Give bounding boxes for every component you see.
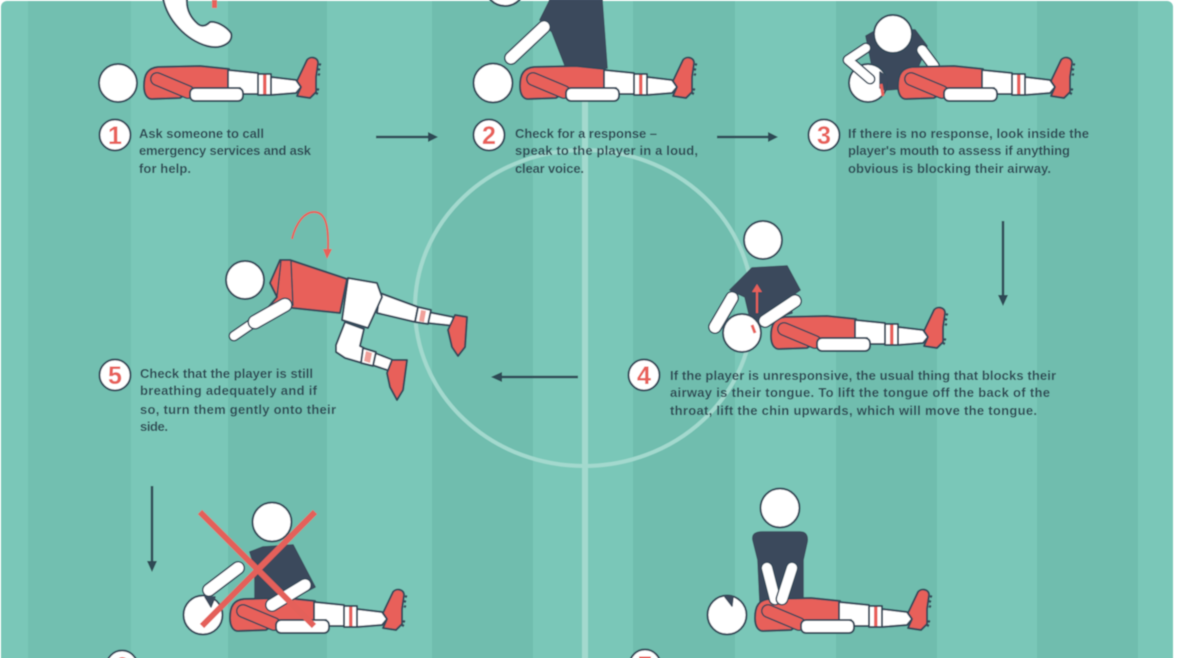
responder torso: [866, 28, 927, 90]
arrow: step 2 to 3: [717, 132, 778, 142]
responder left arm: [715, 298, 732, 327]
number badge 3: 3: [817, 122, 831, 150]
icon: red signal mark: [212, 0, 217, 8]
player arm: [234, 305, 285, 336]
instruction 4: If the player is unresponsive, the usual thing that blocks their: [670, 368, 1056, 383]
step 5 text: [100, 360, 336, 434]
responder head: [252, 502, 292, 542]
responder head: [744, 221, 782, 259]
player head: [708, 596, 746, 634]
player body: [755, 590, 932, 633]
player body: [520, 58, 697, 101]
number badge 5: 5: [108, 362, 122, 390]
arrow: step 3 to 4: [998, 221, 1008, 306]
instruction 4: airway is their tongue. To lift the tongue off the back of the: [670, 385, 1050, 400]
instruction 5: breathing adequately and if: [140, 383, 318, 398]
tongue mark: [881, 84, 883, 96]
red up arrow: [752, 284, 762, 313]
tongue mark: [752, 325, 755, 333]
step 4: lifting the chin: [715, 221, 948, 352]
player head: [723, 314, 761, 352]
responder right arm: [765, 301, 795, 321]
instruction 3: If there is no response, look inside the: [848, 126, 1089, 141]
step 1 text: [100, 120, 312, 176]
mouth wedge: [880, 72, 888, 90]
red cross: [200, 512, 315, 626]
step 1: phone and player lying down: [99, 0, 321, 102]
player head: [99, 64, 137, 102]
instruction 1: emergency services and ask: [139, 143, 312, 158]
player head: [226, 261, 264, 299]
step 5: turning player onto side: [226, 212, 467, 400]
jersey: [265, 260, 347, 313]
instruction 5: Check that the player is still: [140, 366, 313, 381]
arrow: step 1 to 2: [376, 132, 438, 142]
responder torso: [753, 532, 807, 602]
number badge 5: [100, 360, 130, 390]
step 2: responder beside player: [474, 0, 697, 102]
responder arm: [848, 48, 870, 79]
responder torso: [730, 266, 800, 322]
number badge 7: [630, 650, 660, 658]
shorts: [342, 278, 382, 328]
player head: [474, 64, 512, 102]
instruction 1: Ask someone to call: [139, 126, 264, 141]
number badge 4: [628, 360, 660, 390]
player head: [184, 596, 222, 634]
instruction 4: throat, lift the chin upwards, which will move the tongue.: [670, 403, 1037, 418]
arrow: step 5 to 6: [147, 486, 157, 572]
responder far arm: [922, 50, 934, 66]
number badge 2: 2: [482, 122, 496, 150]
player body: [230, 590, 407, 633]
step 6: crossed-out incorrect action: [184, 502, 407, 634]
responder torso: [250, 545, 315, 600]
near leg: [336, 322, 407, 400]
responder head: [760, 488, 800, 528]
instruction 1: for help.: [139, 161, 191, 176]
red rotate arrow: [292, 212, 332, 259]
responder arms: [767, 568, 792, 599]
arrow: step 4 to 5: [491, 372, 578, 382]
number badge 4: 4: [637, 362, 651, 390]
number badge 3: [808, 120, 840, 150]
step 2 text: [474, 120, 698, 176]
instruction 3: obvious is blocking their airway.: [848, 161, 1051, 176]
number badge 1: [100, 120, 130, 150]
number badge 6: [106, 650, 138, 658]
instruction 3: player's mouth to assess if anything: [848, 143, 1070, 158]
responder right arm: [272, 585, 305, 605]
step 7: chest compressions: [708, 488, 932, 634]
step 4 text: [628, 360, 1056, 418]
player body: [144, 58, 321, 101]
instruction 2: Check for a response –: [515, 126, 657, 141]
instruction 5: side.: [140, 419, 168, 434]
step 3 text: [808, 120, 1089, 176]
player body: [771, 308, 948, 351]
instruction 2: speak to the player in a loud,: [515, 143, 698, 158]
responder torso: [540, 0, 607, 68]
responder left arm: [205, 568, 238, 607]
icon: telephone handset: [163, 0, 231, 47]
number badge 2: [474, 120, 504, 150]
instruction 2: clear voice.: [515, 161, 584, 176]
responder head: [874, 15, 912, 53]
instruction 5: so, turn them gently onto their: [140, 402, 336, 417]
responder arm: [511, 27, 544, 58]
player head: [849, 64, 887, 102]
player body: [898, 58, 1075, 101]
number badge 1: 1: [108, 122, 122, 150]
far leg: [377, 293, 467, 356]
chin mark: [725, 597, 733, 606]
step 3: looking in mouth: [848, 15, 1075, 102]
responder head: [485, 0, 525, 6]
